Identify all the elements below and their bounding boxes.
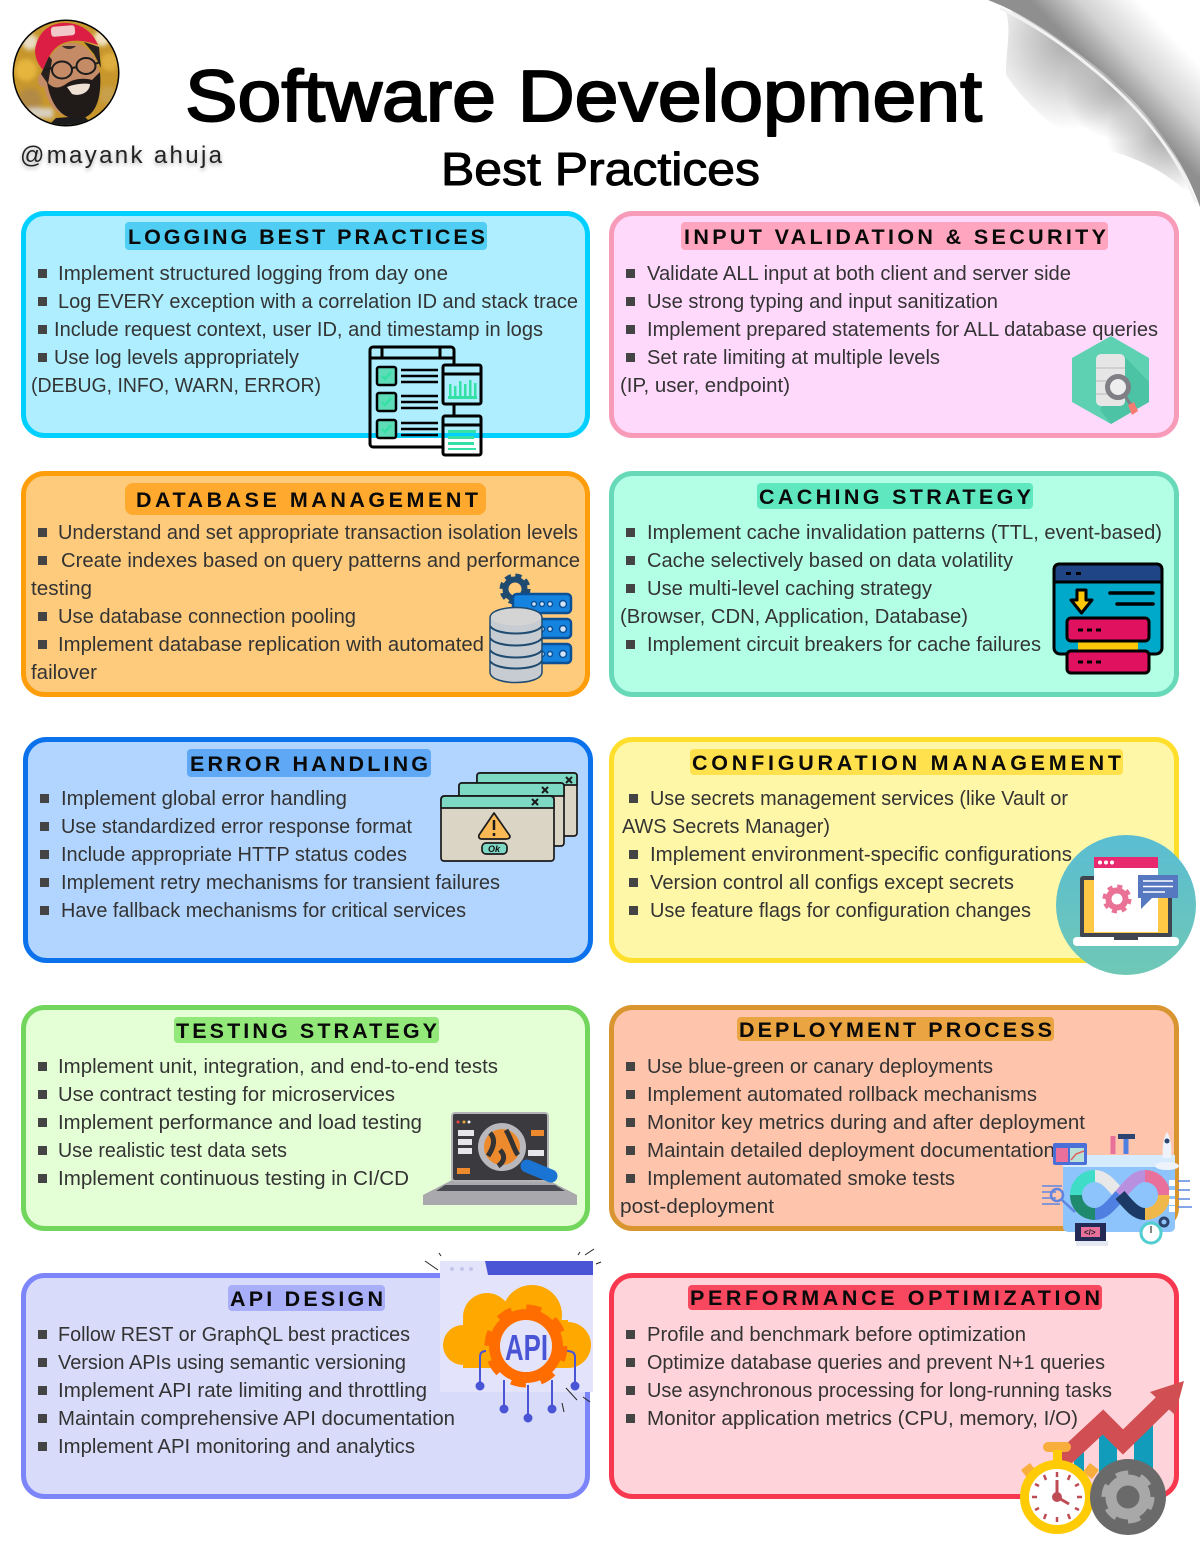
panel: error handling [26,740,590,960]
list: testing: Use realistic test data sets [58,1140,287,1162]
panel: database management [24,474,588,694]
list: caching: Cache selectively based on data volatility [647,550,1013,572]
icon: logging checklist dashboard [370,347,481,455]
icon: config laptop circle [1056,835,1196,975]
list: error handling: Include appropriate HTTP status codes [61,844,407,866]
panel: testing strategy [24,1008,588,1228]
list: performance: Use asynchronous processing for long-running tasks [647,1380,1112,1402]
list: configuration: Version control all configs except secrets [650,872,1014,894]
list: api design [38,1324,455,1458]
list: logging [31,263,578,397]
page curl [988,0,1200,207]
list: performance: Optimize database queries and prevent N+1 queries [647,1352,1105,1374]
icon: performance chart stopwatch gear [1021,1381,1184,1535]
heading: caching: CACHING STRATEGY [759,485,1031,509]
heading: database: DATABASE MANAGEMENT [136,488,478,512]
list: api design: Version APIs using semantic versioning [58,1352,406,1374]
list: api design: Implement API monitoring and analytics [58,1436,415,1458]
heading: api design: API DESIGN [230,1287,383,1311]
list: deployment: Use blue-green or canary deployments [647,1056,993,1078]
list: deployment: Monitor key metrics during and after deployment [647,1112,1085,1134]
panel: deployment process [612,1008,1176,1228]
heading: configuration: CONFIGURATION MANAGEMENT [692,751,1121,775]
subtitle: Best Practices [441,143,760,195]
list: testing: Use contract testing for microservices [58,1084,395,1106]
icon: cache browser stack [1054,564,1162,673]
list: caching: Implement circuit breakers for cache failures [647,634,1041,656]
icon: devops infinity: </> [1084,1228,1096,1237]
list: api design: Maintain comprehensive API documentation [58,1408,455,1430]
list: error handling: Have fallback mechanisms for critical services [61,900,466,922]
list: testing: Implement performance and load testing [58,1112,422,1134]
panel: caching strategy [612,474,1176,694]
heading: logging: LOGGING BEST PRACTICES [128,225,485,249]
list: api design: Follow REST or GraphQL best practices [58,1324,410,1346]
list: error handling [40,788,500,922]
list: performance [626,1324,1112,1430]
panel: logging best practices [24,214,588,436]
panel: api design [24,1276,588,1496]
list: deployment [620,1056,1085,1218]
icon: database servers with gear [490,576,571,682]
avatar photo [10,18,122,130]
list: testing [38,1056,498,1190]
panel: performance optimization [612,1276,1176,1496]
list: database: Use database connection pooling [58,606,356,628]
list: database [31,522,580,684]
list: configuration [622,788,1072,922]
list: input validation: (IP, user, endpoint) [620,375,790,397]
list: deployment: post-deployment [620,1196,774,1218]
panel: input validation and security [612,214,1176,436]
list: input validation: Implement prepared statements for ALL database queries [647,319,1158,341]
list: deployment: Implement automated rollback mechanisms [647,1084,1037,1106]
list: performance: Profile and benchmark before optimization [647,1324,1026,1346]
list: database: Create indexes based on query patterns and performance [61,550,580,572]
panel: configuration management [612,740,1176,960]
list: logging: (DEBUG, INFO, WARN, ERROR) [31,375,321,397]
list: database: testing [31,578,92,600]
list: error handling: Implement global error handling [61,788,347,810]
heading: input validation: INPUT VALIDATION & SECURITY [684,225,1106,249]
list: database: Understand and set appropriate transaction isolation levels [58,522,578,544]
list: configuration: AWS Secrets Manager) [622,816,830,838]
list: configuration: Use secrets management services (like Vault or [650,788,1068,810]
title: Software Development [185,57,982,137]
list: api design: Implement API rate limiting and throttling [58,1380,427,1402]
list: input validation: Set rate limiting at multiple levels [647,347,940,369]
icon: api cloud gear: API [505,1327,548,1368]
heading: performance: PERFORMANCE OPTIMIZATION [690,1286,1100,1310]
heading: error handling: ERROR HANDLING [190,752,428,776]
list: logging: Log EVERY exception with a correlation ID and stack trace [58,291,578,313]
list: caching: Implement cache invalidation patterns (TTL, event-based) [647,522,1162,544]
list: database: failover [31,662,97,684]
list: deployment: Implement automated smoke tests [647,1168,955,1190]
heading: deployment: DEPLOYMENT PROCESS [739,1018,1052,1042]
icon: error dialog windows: Ok [488,844,501,854]
list: caching: (Browser, CDN, Application, Database) [620,606,968,628]
list: performance: Monitor application metrics (CPU, memory, I/O) [647,1408,1078,1430]
list: logging: Use log levels appropriately [54,347,299,369]
list: caching: Use multi-level caching strategy [647,578,932,600]
list: database: Implement database replication with automated [58,634,484,656]
icon: database search hexagon [1072,336,1149,424]
list: configuration: Implement environment-specific configurations [650,844,1072,866]
author handle: @mayank ahuja [20,142,223,169]
list: logging: Implement structured logging from day one [58,263,448,285]
list: configuration: Use feature flags for configuration changes [650,900,1031,922]
list: testing: Implement continuous testing in CI/CD [58,1168,409,1190]
list: input validation: Use strong typing and input sanitization [647,291,998,313]
list: caching [620,522,1162,656]
icon: error dialog windows [441,773,577,861]
list: logging: Include request context, user ID, and timestamp in logs [54,319,543,341]
list: error handling: Use standardized error response format [61,816,412,838]
list: input validation [620,263,1158,397]
icon: laptop with magnifier [423,1113,577,1205]
icon: devops infinity [1042,1132,1192,1246]
heading: testing: TESTING STRATEGY [176,1019,437,1043]
list: input validation: Validate ALL input at both client and server side [647,263,1071,285]
list: error handling: Implement retry mechanisms for transient failures [61,872,500,894]
list: deployment: Maintain detailed deployment documentation [647,1140,1055,1162]
icon: api cloud gear [425,1249,601,1422]
list: testing: Implement unit, integration, and end-to-end tests [58,1056,498,1078]
